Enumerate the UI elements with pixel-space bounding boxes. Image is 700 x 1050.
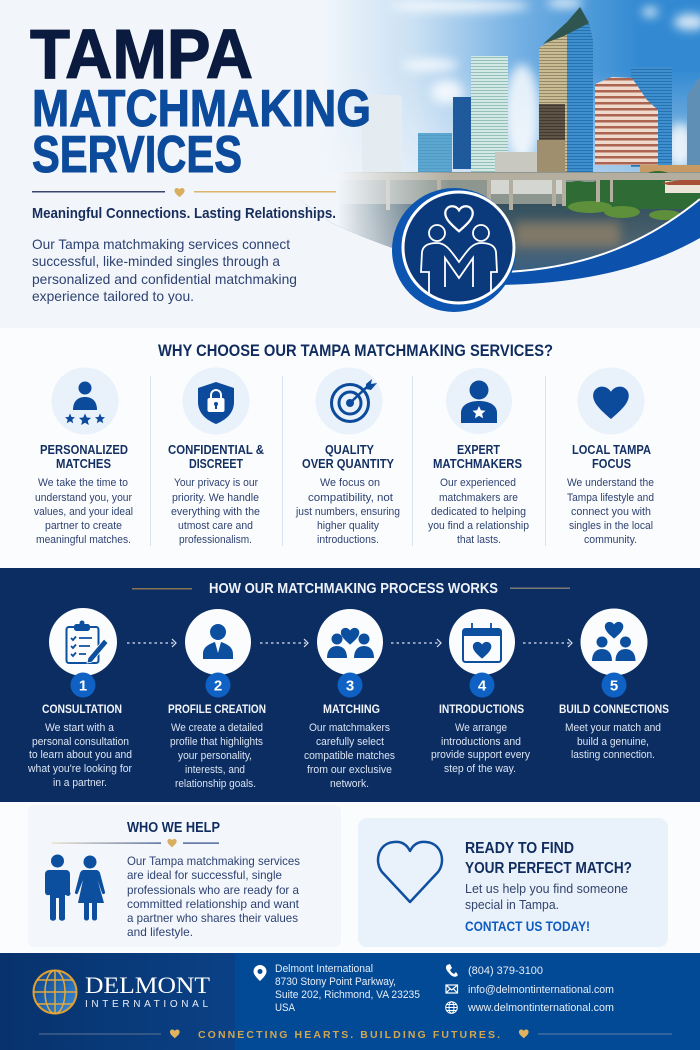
address <box>275 963 420 1014</box>
column: local tampa focus <box>567 368 654 546</box>
column: quality over quantity: OVER QUANTITY <box>302 457 395 471</box>
panel: process <box>0 568 700 802</box>
column: personalized matches: PERSONALIZED <box>40 443 128 457</box>
column: local tampa focus: community. <box>584 534 637 546</box>
step 4 introductions: INTRODUCTIONS <box>439 702 524 716</box>
phone number: (804) 379-3100 <box>468 965 543 977</box>
heading: HOW OUR MATCHMAKING PROCESS WORKS <box>209 580 498 597</box>
logo: Delmont International <box>34 970 210 1014</box>
column: local tampa focus: singles in the local <box>569 520 653 532</box>
step 2 profile creation: interests, and <box>185 764 245 776</box>
address: Delmont International <box>275 963 373 975</box>
email: info@delmontinternational.com <box>468 984 614 996</box>
text <box>127 854 300 939</box>
column: local tampa focus: connect you with <box>571 506 651 518</box>
step 1 consultation: to learn about you and <box>29 749 132 761</box>
column: confidential and discreet: everything with the <box>171 506 260 518</box>
text: a partner who shares their values <box>127 911 298 925</box>
icon: heart outline <box>378 842 442 902</box>
text <box>465 881 628 912</box>
address: USA <box>275 1002 296 1014</box>
column: quality over quantity: just numbers, ensuring <box>295 506 400 518</box>
panel: footer <box>0 953 700 1050</box>
text: are ideal for successful, single <box>127 868 282 882</box>
step 2 profile creation: We create a detailed <box>171 722 263 734</box>
website: www.delmontinternational.com <box>467 1002 614 1014</box>
step 4 introductions: provide support every <box>431 749 530 761</box>
text: Let us help you find someone <box>465 881 628 896</box>
logo: Delmont International: INTERNATIONAL <box>85 999 208 1010</box>
column: confidential and discreet: Your privacy is our <box>174 477 258 489</box>
step 2 profile creation: relationship goals. <box>175 778 256 790</box>
heading: WHO WE HELP <box>127 820 220 836</box>
step 1 consultation: personal consultation <box>32 736 129 748</box>
panel: why choose <box>0 328 700 568</box>
column: quality over quantity: introductions. <box>317 534 379 546</box>
tagline <box>39 1029 672 1041</box>
column: expert matchmakers: that lasts. <box>457 534 501 546</box>
step 3 matching: Our matchmakers <box>309 722 390 734</box>
column: quality over quantity: compatibility, not <box>308 492 393 504</box>
column: local tampa focus: LOCAL TAMPA <box>572 443 651 457</box>
text: committed relationship and want <box>127 897 300 911</box>
column: quality over quantity: higher quality <box>317 520 379 532</box>
column: quality over quantity: We focus on <box>320 477 380 489</box>
ground under the bridge <box>300 172 700 208</box>
title: MATCHMAKING <box>32 80 371 138</box>
title: TAMPA <box>30 15 253 93</box>
step 3 matching: from our exclusive <box>307 764 392 776</box>
step 4 introductions: 4 <box>478 678 487 694</box>
step 2 profile creation: 2 <box>214 678 222 694</box>
column: personalized matches: meaningful matches. <box>36 534 131 546</box>
intro text: successful, like-minded singles through a <box>32 253 280 269</box>
step 5 build connections <box>559 608 669 761</box>
address: Suite 202, Richmond, VA 23235 <box>275 989 420 1001</box>
address: 8730 Stony Point Parkway, <box>275 976 396 988</box>
step 5 build connections: build a genuine, <box>577 736 649 748</box>
step 3 matching: 3 <box>346 678 354 694</box>
step 3 matching: carefully select <box>316 736 384 748</box>
panel: hero <box>0 0 700 328</box>
step 2 profile creation: PROFILE CREATION <box>168 702 266 716</box>
column: confidential and discreet: priority. We handle <box>172 492 259 504</box>
column: personalized matches: partner to create <box>45 520 122 532</box>
step 5 build connections: lasting connection. <box>571 749 655 761</box>
step 5 build connections: Meet your match and <box>565 722 661 734</box>
icon: location pin <box>254 965 266 981</box>
column: confidential and discreet: professionalism. <box>179 534 252 546</box>
skyline photo <box>300 0 700 300</box>
arrows <box>127 639 572 647</box>
panel: who we help <box>28 805 341 947</box>
column: personalized matches: values, and your ideal <box>34 506 133 518</box>
column: personalized matches: understand you, your <box>35 492 132 504</box>
heading: READY TO FIND <box>465 840 574 857</box>
icon: mail <box>446 985 458 993</box>
column: local tampa focus: Tampa lifestyle and <box>567 492 654 504</box>
step 1 consultation: what you're looking for <box>27 763 132 775</box>
column: confidential and discreet <box>168 368 264 546</box>
column: expert matchmakers: Our experienced <box>440 477 516 489</box>
column: confidential and discreet: utmost care and <box>178 520 253 532</box>
title: SERVICES <box>32 126 242 184</box>
step 1 consultation: CONSULTATION <box>42 702 122 716</box>
text: Our Tampa matchmaking services <box>127 854 300 868</box>
step 1 consultation: in a partner. <box>53 777 107 789</box>
column: confidential and discreet: CONFIDENTIAL & <box>168 443 264 457</box>
logo: Delmont International: DELMONT <box>85 973 210 998</box>
heading: WHY CHOOSE OUR TAMPA MATCHMAKING SERVICES? <box>158 342 553 360</box>
icon: phone <box>446 964 458 977</box>
panel: call to action <box>358 818 668 947</box>
text: professionals who are ready for a <box>127 883 299 897</box>
step 4 introductions: introductions and <box>441 736 521 748</box>
column: personalized matches: We take the time to <box>38 477 128 489</box>
trees on the shore <box>562 171 700 209</box>
title <box>30 15 371 184</box>
tagline: Meaningful Connections. Lasting Relationships. <box>32 205 336 222</box>
bridge <box>330 173 700 210</box>
step 2 profile creation <box>168 609 266 790</box>
column: expert matchmakers <box>428 368 529 546</box>
step 2 profile creation: profile that highlights <box>170 736 263 748</box>
step 1 consultation: We start with a <box>45 722 115 734</box>
tagline: CONNECTING HEARTS. BUILDING FUTURES. <box>198 1029 500 1041</box>
column: local tampa focus: FOCUS <box>592 457 631 471</box>
column: quality over quantity: QUALITY <box>325 443 375 457</box>
divider with heart <box>32 188 336 197</box>
intro text <box>32 236 297 304</box>
step 3 matching: MATCHING <box>323 702 380 716</box>
step 3 matching <box>304 609 395 790</box>
column: quality over quantity <box>295 368 400 546</box>
heading <box>465 840 632 877</box>
step 4 introductions <box>431 609 530 775</box>
step 5 build connections: 5 <box>610 678 618 694</box>
column: expert matchmakers: EXPERT <box>457 443 500 457</box>
column: local tampa focus: We understand the <box>567 477 654 489</box>
intro text: Our Tampa matchmaking services connect <box>32 236 290 252</box>
column: expert matchmakers: matchmakers are <box>439 492 518 504</box>
text: special in Tampa. <box>465 897 559 912</box>
call to action link: CONTACT US TODAY! <box>465 918 590 934</box>
column: expert matchmakers: MATCHMAKERS <box>433 457 522 471</box>
step 5 build connections: BUILD CONNECTIONS <box>559 702 669 716</box>
column: confidential and discreet: DISCREET <box>189 457 243 471</box>
heading: YOUR PERFECT MATCH? <box>465 860 632 877</box>
column: expert matchmakers: you find a relationship <box>428 520 529 532</box>
text: and lifestyle. <box>127 925 193 939</box>
step 1 consultation: 1 <box>79 678 87 694</box>
intro text: experience tailored to you. <box>32 288 194 304</box>
intro text: personalized and confidential matchmaking <box>32 271 297 287</box>
step 4 introductions: We arrange <box>455 722 507 734</box>
column: expert matchmakers: dedicated to helping <box>431 506 526 518</box>
step 1 consultation <box>27 608 132 789</box>
swoosh <box>490 200 700 285</box>
step 2 profile creation: your personality, <box>178 750 252 762</box>
icon: man and woman <box>45 854 105 921</box>
step 3 matching: network. <box>330 778 369 790</box>
column: personalized matches <box>34 368 133 546</box>
icon: globe <box>446 1002 457 1013</box>
emblem: couple <box>392 188 516 312</box>
step 4 introductions: step of the way. <box>444 763 516 775</box>
column: personalized matches: MATCHES <box>56 457 111 471</box>
step 3 matching: compatible matches <box>304 750 395 762</box>
